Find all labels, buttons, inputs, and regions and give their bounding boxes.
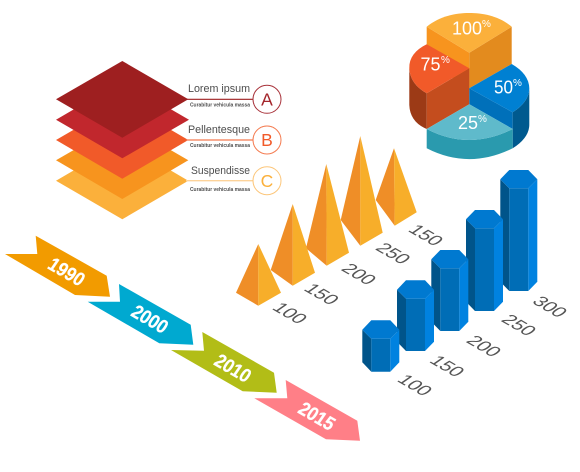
pyramid: 150 bbox=[271, 204, 315, 286]
slice: 25%: % bbox=[478, 114, 487, 125]
panel: hexagonal bar chart bbox=[362, 170, 572, 399]
callout: C: Suspendisse bbox=[191, 165, 250, 177]
bar axis labels bbox=[393, 293, 572, 399]
callout: B: Curabitur vehicula massa bbox=[190, 143, 250, 149]
slice: 75% bbox=[409, 44, 469, 129]
bar: 100 bbox=[362, 320, 399, 372]
callout: A: Curabitur vehicula massa bbox=[190, 102, 250, 108]
callout: C: C bbox=[261, 171, 273, 191]
arrow: 2015 bbox=[254, 380, 360, 441]
callout: A bbox=[186, 83, 281, 113]
slice: 75%: 75 bbox=[420, 55, 440, 75]
pyramid: 150 back bbox=[376, 148, 417, 226]
pyramid axis labels: 150 bbox=[300, 280, 344, 308]
slice: 100%: 100 bbox=[452, 18, 482, 38]
slice: 75%: % bbox=[441, 55, 450, 66]
panel: 3D pie chart bbox=[409, 13, 529, 159]
pyramid axis labels: 150 bbox=[404, 221, 448, 249]
bar axis labels: 100 bbox=[393, 371, 437, 399]
slice: 50%: % bbox=[513, 78, 522, 89]
bar: 250 bbox=[466, 210, 503, 311]
bar axis labels: 250 bbox=[497, 311, 541, 339]
callout: B: B bbox=[261, 130, 273, 150]
bar axis labels: 300 bbox=[528, 293, 572, 320]
pyramid: 200 bbox=[306, 164, 349, 266]
panel: timeline arrows bbox=[5, 236, 360, 441]
pyramid axis labels bbox=[268, 221, 448, 327]
slice: 50% bbox=[469, 64, 529, 148]
arrow: 2000 bbox=[88, 284, 193, 345]
arrow: 2015: 2015 bbox=[294, 398, 339, 435]
slice: 50%: 50 bbox=[494, 77, 513, 97]
bar axis labels: 200 bbox=[462, 332, 506, 360]
pyramid: 250 bbox=[341, 136, 383, 246]
slice: 25% bbox=[427, 104, 513, 159]
pyramid axis labels: 100 bbox=[268, 299, 312, 327]
panel: pyramid chart bbox=[236, 136, 448, 327]
pyramid: 100 bbox=[236, 244, 281, 306]
panel: layer stack bbox=[56, 61, 189, 219]
arrow: 2010 bbox=[171, 332, 277, 393]
arrow: 2000: 2000 bbox=[127, 301, 172, 338]
callout: A: A bbox=[261, 90, 273, 110]
callout: C: Curabitur vehicula massa bbox=[190, 187, 250, 193]
callout: A: Lorem ipsum bbox=[188, 83, 250, 95]
slice: 100%: % bbox=[482, 19, 491, 30]
callout: B bbox=[186, 124, 281, 154]
bar axis labels: 150 bbox=[425, 352, 470, 380]
callout: B: Pellentesque bbox=[188, 124, 250, 136]
arrow: 1990: 1990 bbox=[44, 254, 89, 291]
pyramid axis labels: 250 bbox=[371, 239, 416, 267]
callout: C bbox=[186, 165, 281, 195]
bar: 200 bbox=[431, 250, 468, 331]
arrow: 1990 bbox=[5, 236, 110, 297]
slice: 100% bbox=[427, 13, 512, 90]
slice: 25%: 25 bbox=[458, 113, 478, 133]
bar: 150 bbox=[397, 280, 434, 351]
pyramid axis labels: 200 bbox=[337, 260, 381, 288]
arrow: 2010: 2010 bbox=[210, 350, 255, 387]
bar: 300 bbox=[500, 170, 537, 291]
